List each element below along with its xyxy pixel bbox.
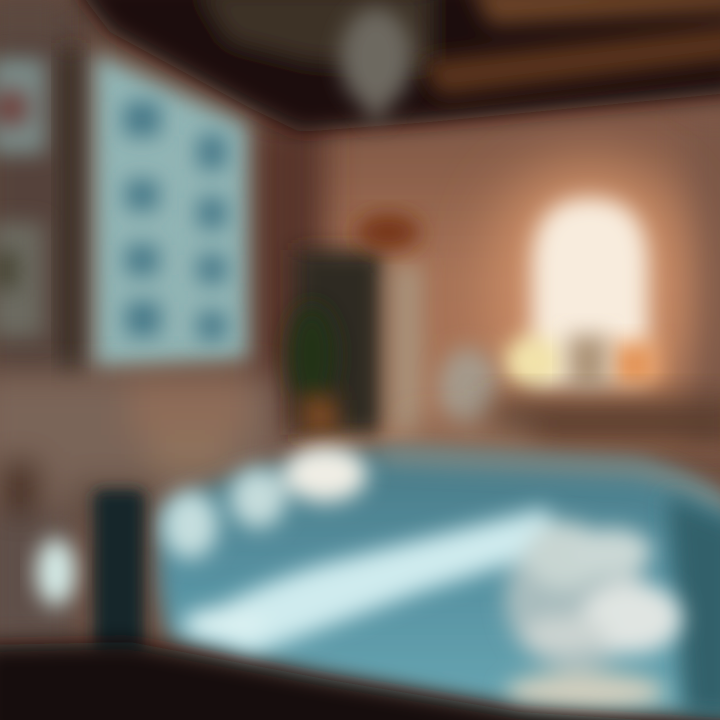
dark doorway cabinet [295, 250, 422, 435]
beams [420, 0, 720, 95]
lower left wall [0, 375, 280, 645]
white oval highlight at left [36, 538, 76, 606]
window panes [124, 102, 226, 340]
blue paned window [94, 52, 248, 370]
wall: left dark section [0, 0, 325, 430]
dark foreground edge [0, 642, 720, 720]
white jar on ledge [438, 348, 498, 428]
dark post beside window [60, 50, 82, 375]
left framed pictures [0, 58, 46, 338]
arched glowing window [495, 165, 685, 405]
tub rim [380, 455, 720, 510]
right dark water [668, 495, 720, 720]
orange wall ornament [356, 214, 420, 250]
ceiling with beams [0, 0, 720, 132]
ceiling lamp [340, 8, 412, 120]
potted plant [288, 305, 338, 434]
bathtub water [157, 446, 720, 720]
water highlights and foam [162, 446, 682, 712]
dark bottle [94, 490, 144, 655]
tub ledge [410, 398, 720, 447]
wall: right edge shadow [685, 110, 720, 450]
